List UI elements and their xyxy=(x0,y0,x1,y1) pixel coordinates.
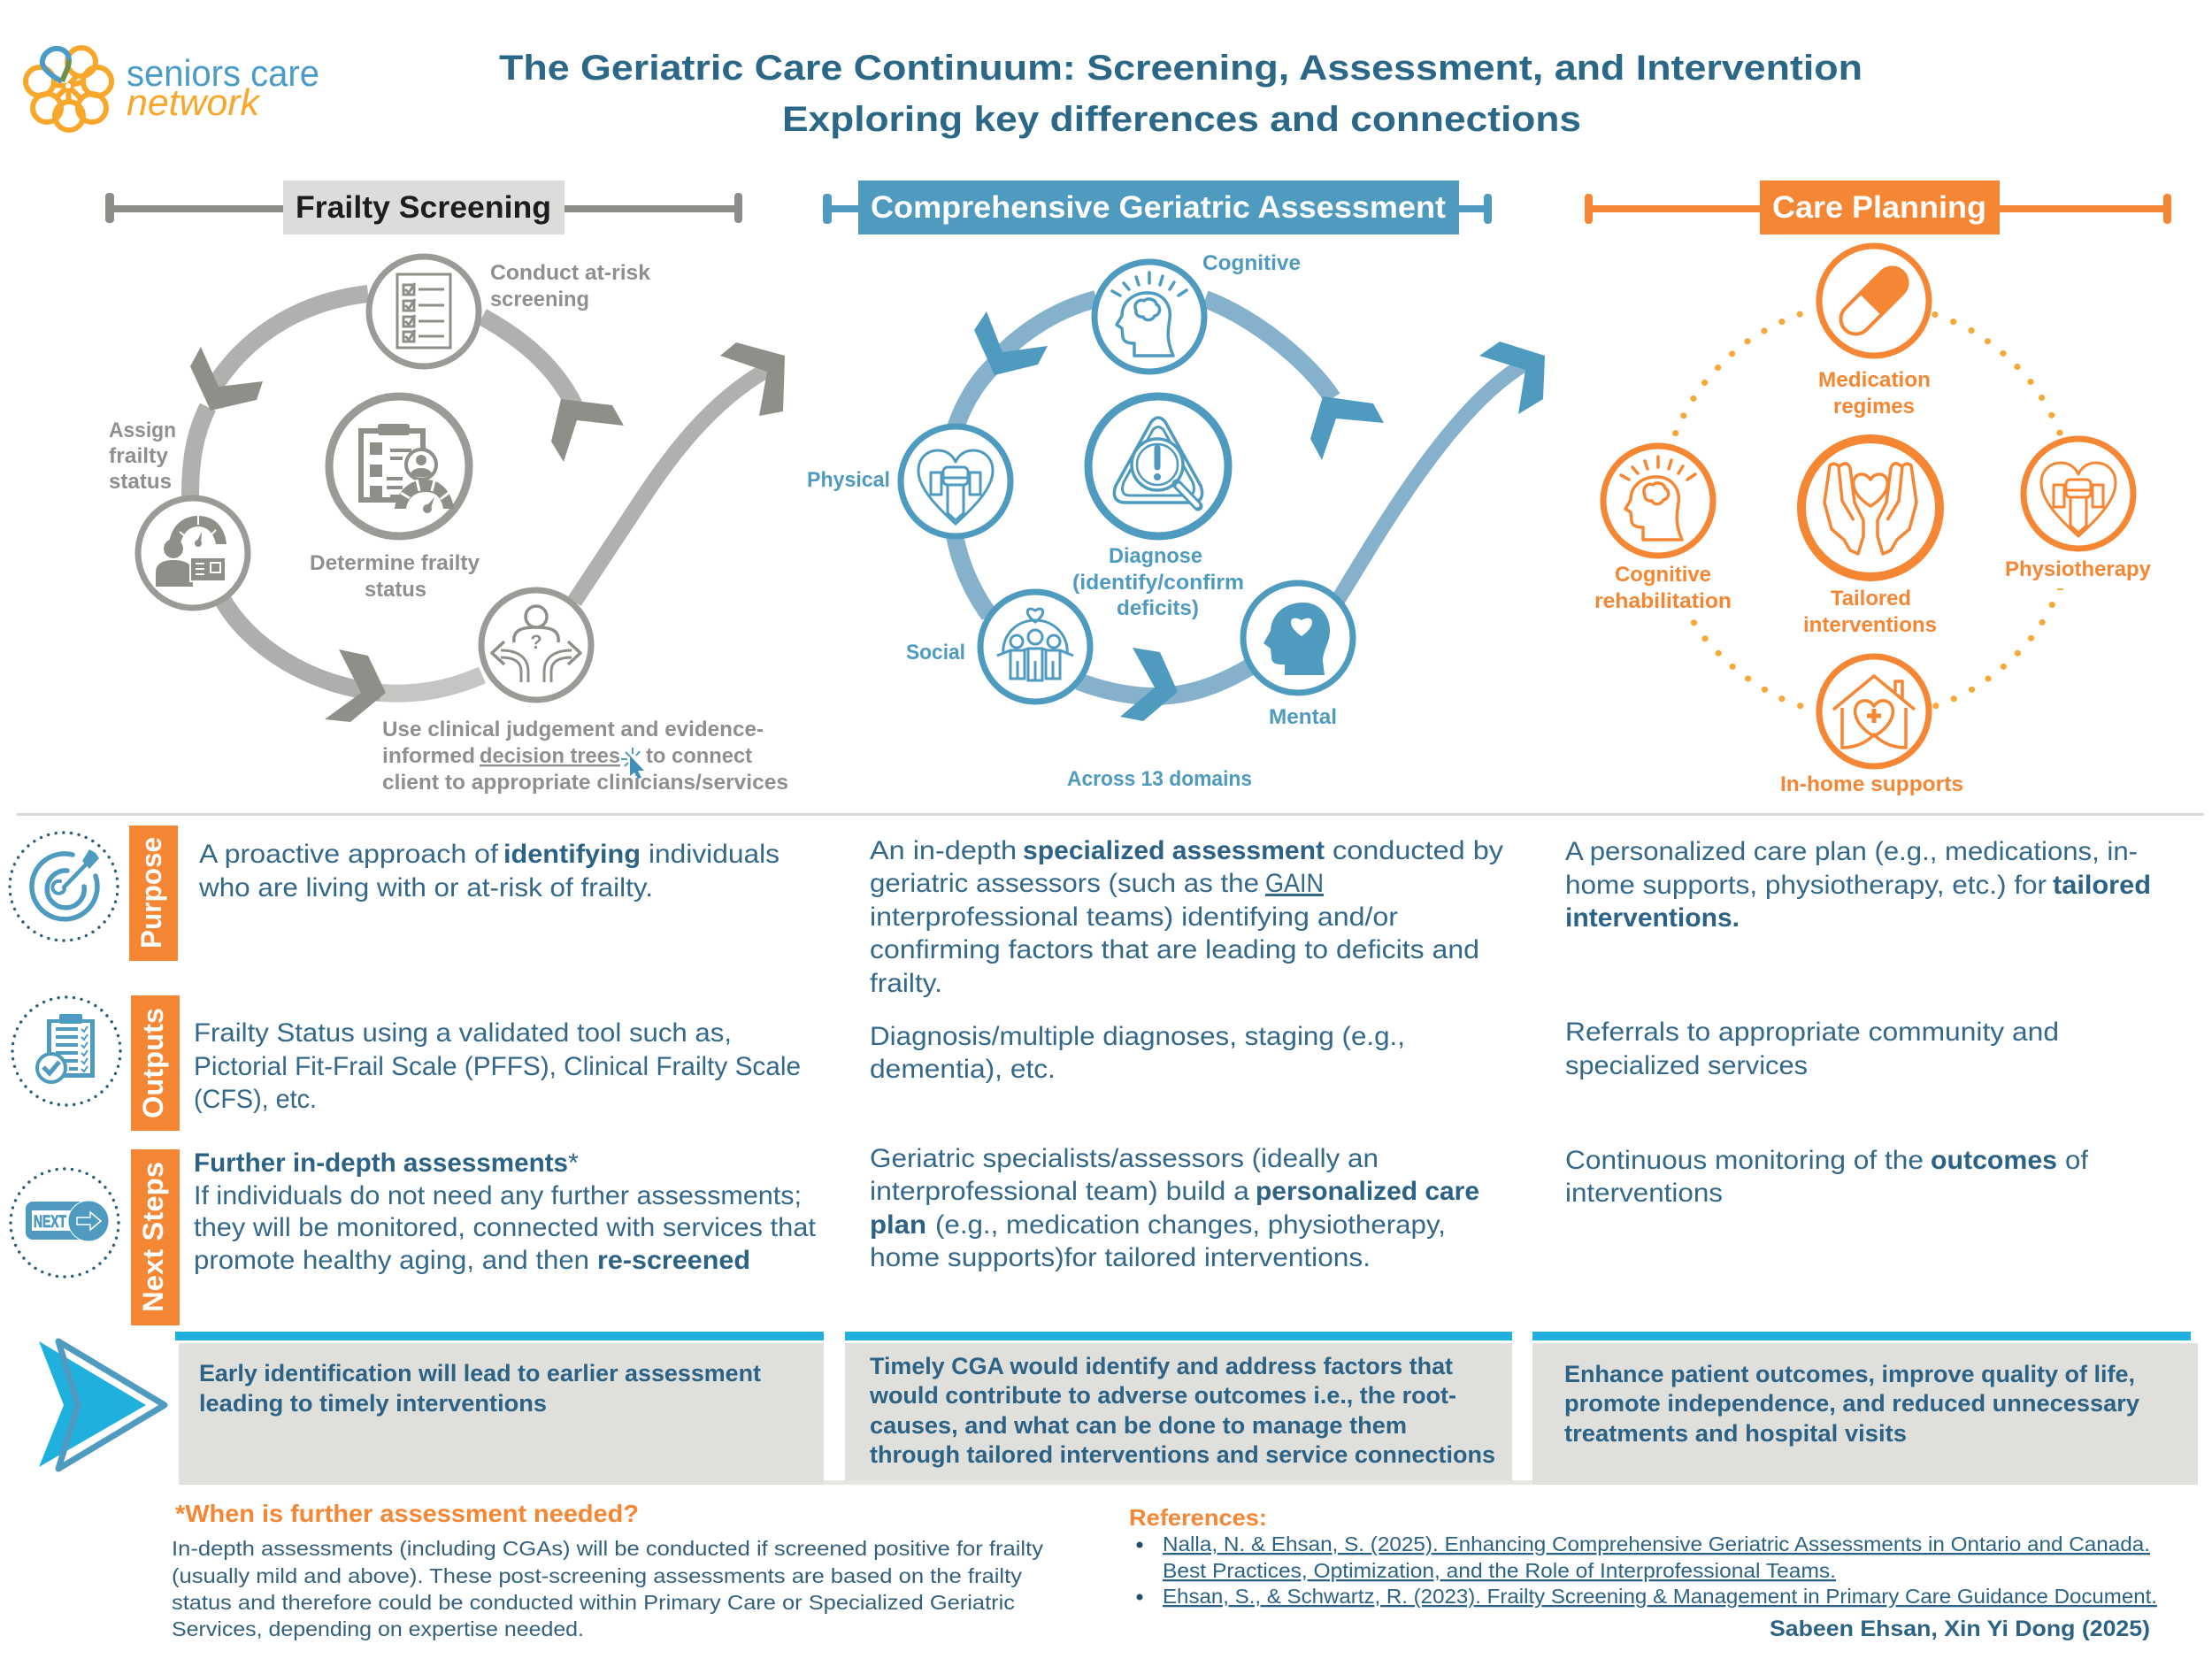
text: outputs frailty screening: Frailty Status using a validated tool such as, xyxy=(194,1018,732,1048)
text: next steps frailty screening: * xyxy=(568,1148,579,1178)
text: next steps frailty screening: they will be monitored, connected with services that xyxy=(194,1213,817,1242)
impact: assessment xyxy=(845,1332,1512,1480)
references xyxy=(1129,1504,2157,1608)
tag: outputs xyxy=(131,995,180,1131)
labels: assessment domains: Social xyxy=(906,641,965,664)
impact: care planning: Enhance patient outcomes, improve quality of life, xyxy=(1564,1361,2135,1387)
labels: frailty screening xyxy=(109,261,788,795)
text: next steps care planning: interventions xyxy=(1565,1179,1723,1208)
text: purpose assessment: frailty. xyxy=(870,969,942,998)
text: next steps care planning: outcomes xyxy=(1931,1146,2057,1175)
text: next steps assessment: plan xyxy=(870,1210,926,1240)
impact: assessment: would contribute to adverse outcomes i.e., the root- xyxy=(869,1382,1456,1409)
labels: frailty screening: frailty xyxy=(109,444,169,468)
tag: purpose xyxy=(129,826,178,961)
labels: assessment domains: (identify/confirm xyxy=(1072,571,1244,595)
labels: care planning: Tailored xyxy=(1831,587,1911,611)
labels: assessment domains xyxy=(807,251,1337,791)
footnote: when is further assessment needed: In-depth assessments (including CGAs) will be conducted if screened positive for frailty xyxy=(172,1537,1044,1560)
labels: frailty screening: Use clinical judgement and evidence- xyxy=(382,718,764,741)
panel: impact band xyxy=(175,1332,2198,1485)
text: purpose assessment: interprofessional teams) identifying and/or xyxy=(870,902,1398,932)
text: outputs frailty screening xyxy=(194,1018,801,1114)
labels: care planning: Physiotherapy xyxy=(2005,557,2152,581)
text: purpose assessment: geriatric assessors (such as the xyxy=(870,869,1259,898)
icon: checklist xyxy=(369,257,479,366)
icon: medication xyxy=(1819,246,1929,356)
labels: assessment domains: Diagnose xyxy=(1109,544,1202,568)
text: purpose frailty screening: who are living with or at-risk of frailty. xyxy=(198,873,653,902)
text: next steps frailty screening: promote healthy aging, and then xyxy=(194,1246,589,1275)
text: next steps care planning: Continuous monitoring of the xyxy=(1565,1146,1924,1175)
icon: big chevron arrow xyxy=(39,1341,165,1469)
logo wordmark: seniors care xyxy=(127,52,319,94)
text: outputs frailty screening: (CFS), etc. xyxy=(194,1085,317,1114)
footnote: when is further assessment needed: *When is further assessment needed? xyxy=(175,1500,639,1527)
title xyxy=(499,49,1863,139)
labels: care planning: rehabilitation xyxy=(1594,589,1732,613)
labels: assessment domains: Cognitive xyxy=(1202,251,1301,275)
labels: frailty screening: decision trees xyxy=(480,744,620,768)
impact: care planning: treatments and hospital visits xyxy=(1564,1420,1907,1447)
credits: Sabeen Ehsan, Xin Yi Dong (2025) xyxy=(1770,1617,2150,1641)
impact: care planning xyxy=(1532,1332,2198,1485)
text: purpose assessment xyxy=(870,836,1503,998)
impact: assessment: causes, and what can be done to manage them xyxy=(870,1412,1407,1439)
text: next steps frailty screening: Further in-depth assessments xyxy=(194,1148,568,1178)
heading: care planning: Care Planning xyxy=(1772,190,1986,225)
row: next steps xyxy=(11,1144,2089,1325)
heading: care planning xyxy=(1585,180,2171,234)
icon: flower logo xyxy=(26,48,111,130)
labels: care planning xyxy=(1594,368,2152,796)
labels: frailty screening: Assign xyxy=(109,419,176,442)
labels: assessment domains: Across 13 domains xyxy=(1067,767,1252,791)
text: purpose assessment: conducted by xyxy=(1333,836,1503,865)
text: purpose assessment: An in-depth xyxy=(870,836,1017,865)
heading: frailty screening xyxy=(105,180,742,234)
text: purpose care planning: interventions. xyxy=(1565,903,1740,933)
text: purpose assessment: confirming factors that are leading to deficits and xyxy=(870,935,1479,964)
references: Nalla, N. & Ehsan, S. (2025). Enhancing Comprehensive Geriatric Assessments in Ontario and Canada. xyxy=(1163,1532,2150,1555)
labels: frailty screening: Conduct at-risk xyxy=(490,261,651,285)
icon: in-home supports xyxy=(1819,657,1929,766)
footnote: when is further assessment needed xyxy=(172,1500,1044,1640)
icon: physiotherapy xyxy=(2024,439,2133,549)
text: next steps assessment: home supports)for tailored interventions. xyxy=(870,1243,1371,1272)
footnote: when is further assessment needed: status and therefore could be conducted within Primary Care or Specialized Geriatric xyxy=(172,1591,1015,1614)
text: purpose care planning: tailored xyxy=(2053,871,2151,900)
icon: cursor click xyxy=(621,748,644,779)
labels: frailty screening: status xyxy=(109,470,172,494)
icon: determine frailty status clipboard xyxy=(329,396,469,536)
labels: frailty screening: to connect xyxy=(646,744,752,768)
tag: next steps: Next Steps xyxy=(137,1162,169,1312)
references: References: xyxy=(1129,1504,1267,1531)
text: next steps assessment xyxy=(870,1144,1479,1272)
icon: next button xyxy=(11,1169,119,1277)
text: next steps assessment: interprofessional team) build a xyxy=(870,1177,1249,1206)
text: outputs frailty screening: Pictorial Fit-Frail Scale (PFFS), Clinical Frailty Scale xyxy=(194,1052,801,1081)
text: next steps care planning: of xyxy=(2065,1146,2089,1175)
footnote: when is further assessment needed: (usually mild and above). These post-screening assessments are based on the frailty xyxy=(172,1564,1023,1587)
icon: decision tree person xyxy=(481,590,591,700)
icon: clipboard check xyxy=(12,997,120,1105)
labels: care planning: regimes xyxy=(1833,395,1915,419)
labels: assessment domains: Physical xyxy=(807,468,890,492)
labels: care planning: Medication xyxy=(1818,368,1931,392)
chevrons xyxy=(190,342,785,722)
icon: cognitive rehabilitation xyxy=(1603,446,1713,556)
labels: care planning: interventions xyxy=(1803,613,1937,637)
labels: frailty screening: screening xyxy=(490,288,589,311)
text: purpose assessment: specialized assessment xyxy=(1023,836,1325,865)
title: Exploring key differences and connections xyxy=(782,100,1581,139)
footnote: when is further assessment needed: Services, depending on expertise needed. xyxy=(172,1617,584,1640)
impact: frailty screening: Early identification will lead to earlier assessment xyxy=(199,1360,761,1386)
tag: purpose: Purpose xyxy=(135,837,167,949)
labels: care planning: In-home supports xyxy=(1780,772,1963,796)
icon: diagnose warning magnifier xyxy=(1088,396,1228,536)
panel: comprehensive geriatric assessment xyxy=(807,180,1545,791)
cycle arrows xyxy=(190,294,770,694)
text: next steps frailty screening: If individuals do not need any further assessments; xyxy=(194,1181,802,1210)
text: purpose care planning: home supports, physiotherapy, etc.) for xyxy=(1565,871,2047,900)
icon: mental xyxy=(1243,583,1353,693)
text: outputs assessment: Diagnosis/multiple diagnoses, staging (e.g., xyxy=(870,1022,1405,1051)
text: outputs care planning: specialized services xyxy=(1565,1051,1808,1080)
impact: assessment: through tailored interventions and service connections xyxy=(870,1441,1495,1468)
impact: frailty screening xyxy=(175,1332,824,1485)
logo wordmark: network xyxy=(127,81,261,123)
text: purpose frailty screening xyxy=(198,840,780,902)
chevrons xyxy=(974,311,1545,721)
labels: care planning: Cognitive xyxy=(1615,563,1711,587)
text: outputs assessment xyxy=(870,1022,1405,1084)
icon: cognitive xyxy=(1094,262,1204,372)
labels: assessment domains: Mental xyxy=(1269,705,1337,729)
text: purpose frailty screening: A proactive approach of xyxy=(199,840,499,869)
text: next steps assessment: personalized care xyxy=(1256,1177,1479,1206)
impact: frailty screening: leading to timely interventions xyxy=(199,1390,547,1417)
text: next steps assessment: (e.g., medication changes, physiotherapy, xyxy=(935,1210,1446,1240)
text: outputs care planning xyxy=(1565,1018,2059,1080)
logo wordmark xyxy=(127,52,319,123)
text: purpose assessment: GAIN xyxy=(1265,869,1324,898)
text: next steps frailty screening xyxy=(194,1148,817,1275)
row: purpose xyxy=(10,826,2151,998)
logo: seniors care network xyxy=(26,48,319,130)
impact: assessment: Timely CGA would identify and address factors that xyxy=(870,1353,1453,1379)
text: purpose care planning xyxy=(1565,837,2151,933)
references: Best Practices, Optimization, and the Role of Interprofessional Teams. xyxy=(1163,1559,1836,1582)
text: outputs assessment: dementia), etc. xyxy=(870,1055,1056,1084)
icon: decision tree person: ? xyxy=(530,631,542,653)
title: The Geriatric Care Continuum: Screening, Assessment, and Intervention xyxy=(499,49,1863,88)
references: Ehsan, S., & Schwartz, R. (2023). Frailty Screening & Management in Primary Care Guidance Document. xyxy=(1163,1585,2157,1608)
text: purpose care planning: A personalized care plan (e.g., medications, in- xyxy=(1565,837,2138,866)
tag: outputs: Outputs xyxy=(137,1008,169,1118)
heading: comprehensive geriatric assessment: Comprehensive Geriatric Assessment xyxy=(871,190,1446,225)
icon: next button: NEXT xyxy=(34,1213,66,1232)
icon: physical xyxy=(901,426,1010,536)
row: outputs xyxy=(12,995,2059,1131)
heading: comprehensive geriatric assessment xyxy=(823,180,1492,234)
text: next steps frailty screening: re-screened xyxy=(597,1246,750,1275)
dotted diamond ring xyxy=(1672,311,2063,709)
icon: target xyxy=(10,833,118,941)
text: purpose frailty screening: individuals xyxy=(649,840,780,869)
labels: assessment domains: deficits) xyxy=(1117,596,1199,620)
labels: frailty screening: informed xyxy=(382,744,475,768)
heading: frailty screening: Frailty Screening xyxy=(296,190,551,225)
text: outputs care planning: Referrals to appropriate community and xyxy=(1565,1018,2059,1047)
labels: frailty screening: client to appropriate clinicians/services xyxy=(382,771,788,795)
text: next steps assessment: Geriatric specialists/assessors (ideally an xyxy=(870,1144,1379,1173)
labels: frailty screening: status xyxy=(365,578,426,602)
icon: social xyxy=(980,592,1090,702)
labels: frailty screening: Determine frailty xyxy=(310,551,480,575)
text: purpose frailty screening: identifying xyxy=(503,840,641,869)
cycle arrows xyxy=(954,299,1525,696)
panel: frailty screening xyxy=(105,180,788,795)
text: next steps care planning xyxy=(1565,1146,2089,1208)
icon: assign status person with gauge xyxy=(138,498,248,608)
tag: next steps xyxy=(131,1149,180,1325)
icon: tailored interventions hands xyxy=(1801,439,1939,577)
impact: care planning: promote independence, and reduced unnecessary xyxy=(1564,1390,2139,1417)
panel: care planning xyxy=(1585,180,2171,796)
